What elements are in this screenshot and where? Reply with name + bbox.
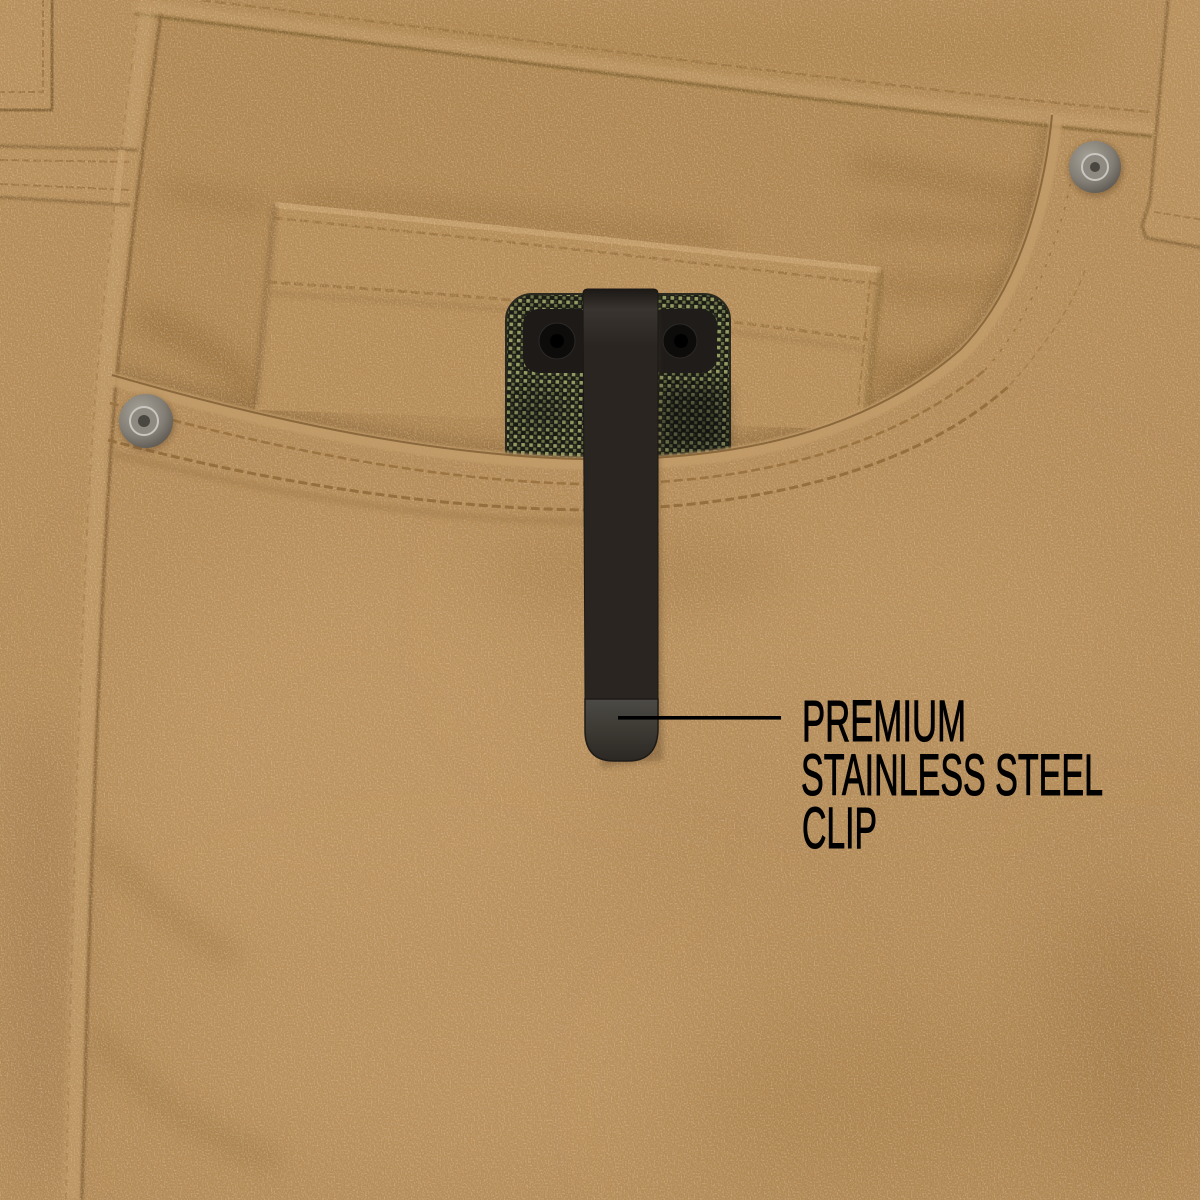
weave darkening <box>512 385 725 450</box>
right belt loop <box>1142 0 1200 248</box>
pocket edge and stitching <box>108 115 1085 522</box>
holster plate <box>506 294 730 474</box>
left rear pocket band <box>0 146 138 205</box>
mounting block left <box>523 309 583 373</box>
soft wrinkles lower left <box>100 850 270 1160</box>
callout label <box>801 689 1103 861</box>
clip folded tip <box>585 699 658 761</box>
clip body <box>583 289 658 700</box>
stainless steel clip <box>583 289 663 768</box>
waistband seam <box>135 0 1160 137</box>
callout label: CLIP <box>802 796 877 861</box>
screw left <box>539 323 575 359</box>
rivet left <box>119 394 175 451</box>
pocket opening back area with soft folds <box>119 127 1049 453</box>
clip shadow <box>600 300 663 768</box>
callout label: PREMIUM <box>802 689 966 754</box>
left belt loop <box>0 0 52 110</box>
coin pocket <box>255 205 881 430</box>
mounting block right <box>658 309 717 373</box>
screw right <box>663 324 697 358</box>
callout leader line <box>618 716 781 720</box>
side seam <box>66 12 161 1200</box>
rivet right <box>1068 141 1124 197</box>
